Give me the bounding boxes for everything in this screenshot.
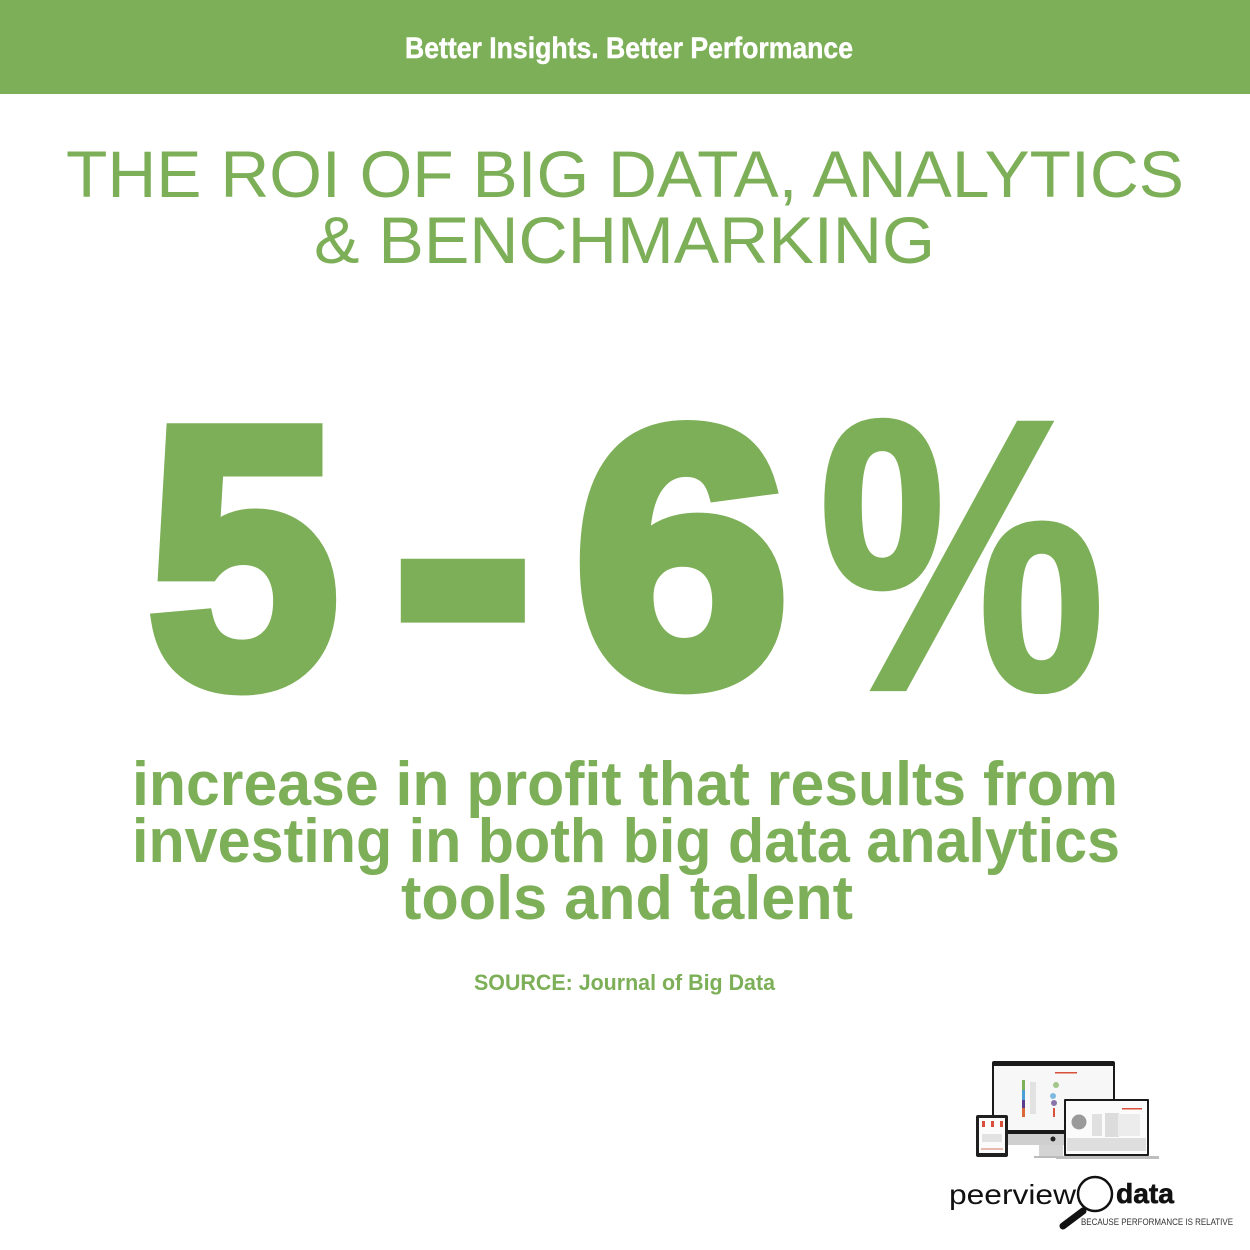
- icon: laptop: [1056, 1099, 1159, 1159]
- icon: tablet: [976, 1115, 1008, 1157]
- description: tools and talent: [401, 864, 853, 933]
- icon: magnifying glass: [1063, 1177, 1112, 1226]
- description: [132, 750, 1120, 933]
- logo: wordmark: [949, 1177, 1233, 1228]
- title: THE ROI OF BIG DATA, ANALYTICS: [66, 137, 1184, 211]
- title: & BENCHMARKING: [314, 203, 935, 277]
- big statistic: 5-6%: 5: [148, 353, 338, 763]
- big statistic: 5-6%: -: [385, 273, 541, 822]
- icon: desktop monitor: [992, 1061, 1115, 1158]
- logo: wordmark: data: [1116, 1178, 1174, 1209]
- description: investing in both big data analytics: [132, 807, 1120, 876]
- logo: devices: [976, 1061, 1159, 1159]
- title: [66, 137, 1184, 277]
- big statistic: 5-6%: [148, 273, 1106, 822]
- logo: wordmark: peerview: [949, 1179, 1077, 1210]
- header banner: Better Insights. Better Performance: [405, 32, 853, 65]
- big statistic: 5-6%: %: [818, 339, 1106, 771]
- source: SOURCE: Journal of Big Data: [474, 970, 776, 995]
- description: increase in profit that results from: [132, 750, 1118, 819]
- big statistic: 5-6%: 6: [575, 354, 788, 760]
- header banner: [0, 0, 1250, 94]
